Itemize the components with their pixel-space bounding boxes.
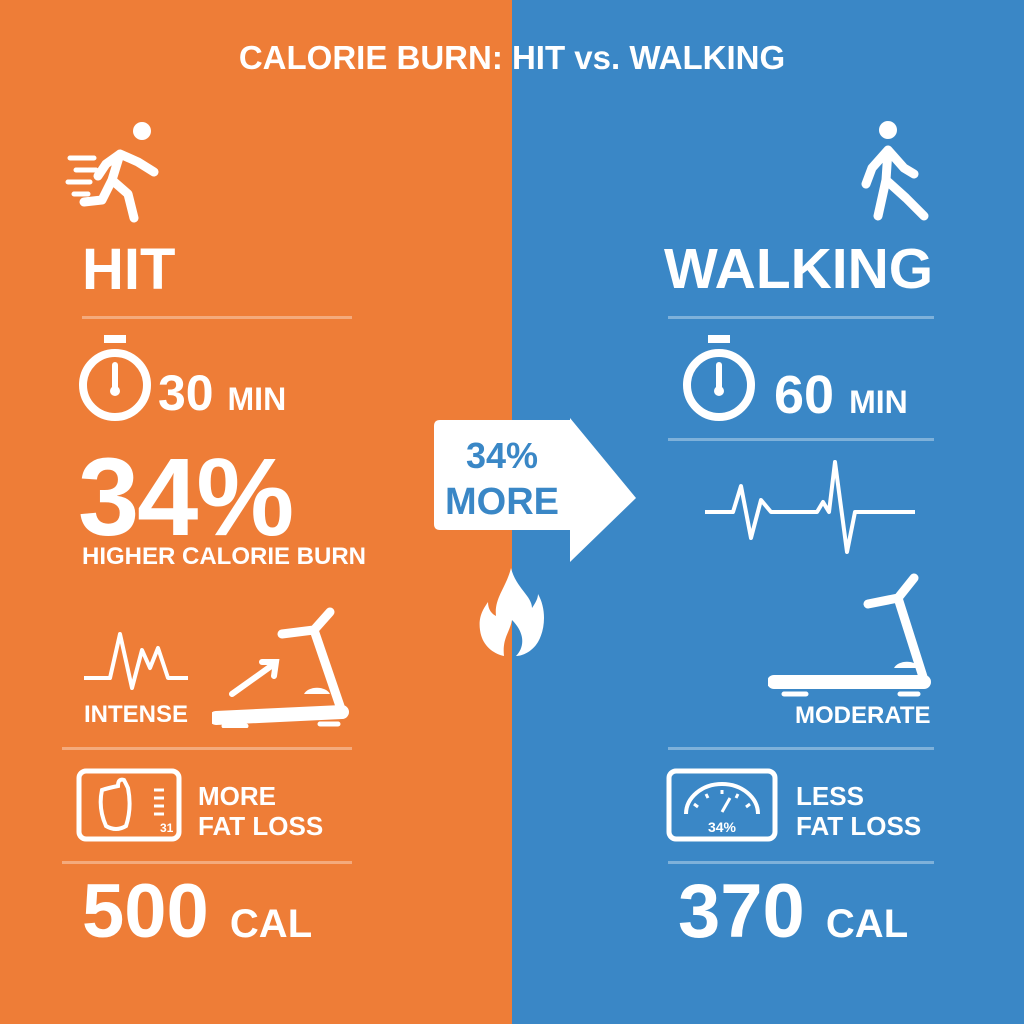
stat: 500 cal: 500 CAL xyxy=(82,869,312,954)
title: CALORIE BURN: HIT vs. WALKING xyxy=(239,39,785,76)
text: more fat loss xyxy=(198,781,323,841)
heading: WALKING: WALKING xyxy=(664,237,933,301)
text: less fat loss: LESS xyxy=(796,781,864,811)
text: higher calorie burn: HIGHER CALORIE BURN xyxy=(82,543,366,570)
heading: HIT: HIT xyxy=(82,237,175,302)
text: 60 MIN: 60 MIN xyxy=(774,365,908,425)
callout arrow: 34% more xyxy=(434,418,636,562)
icon: scale box xyxy=(666,768,778,842)
icon: intense heartbeat xyxy=(84,632,188,690)
icon: fat loss box xyxy=(76,768,182,842)
text: moderate: MODERATE xyxy=(795,702,931,729)
text: less fat loss xyxy=(796,781,921,841)
text: more fat loss: MORE xyxy=(198,781,276,811)
icon: treadmill flat xyxy=(768,574,931,696)
icon: walker xyxy=(862,121,928,220)
icon: flame xyxy=(480,568,544,656)
text: 30 MIN: 30 MIN xyxy=(158,365,286,421)
stat: 370 cal: 370 CAL xyxy=(678,869,908,954)
icon: treadmill incline xyxy=(212,608,349,728)
text: intense: INTENSE xyxy=(84,701,188,728)
icon: runner xyxy=(66,122,158,222)
text: more fat loss: FAT LOSS xyxy=(198,811,323,841)
icon: heartbeat moderate xyxy=(705,460,915,554)
big stat 34%: 34% xyxy=(78,436,292,559)
text: less fat loss: FAT LOSS xyxy=(796,811,921,841)
callout arrow: 34% more: MORE xyxy=(445,481,559,523)
callout arrow: 34% more: 34% xyxy=(466,435,538,476)
icon: fat loss box: 31 xyxy=(160,821,174,835)
icon: stopwatch left xyxy=(79,335,151,421)
icon: stopwatch right xyxy=(683,335,755,421)
icon: scale box: 34% xyxy=(708,819,737,835)
